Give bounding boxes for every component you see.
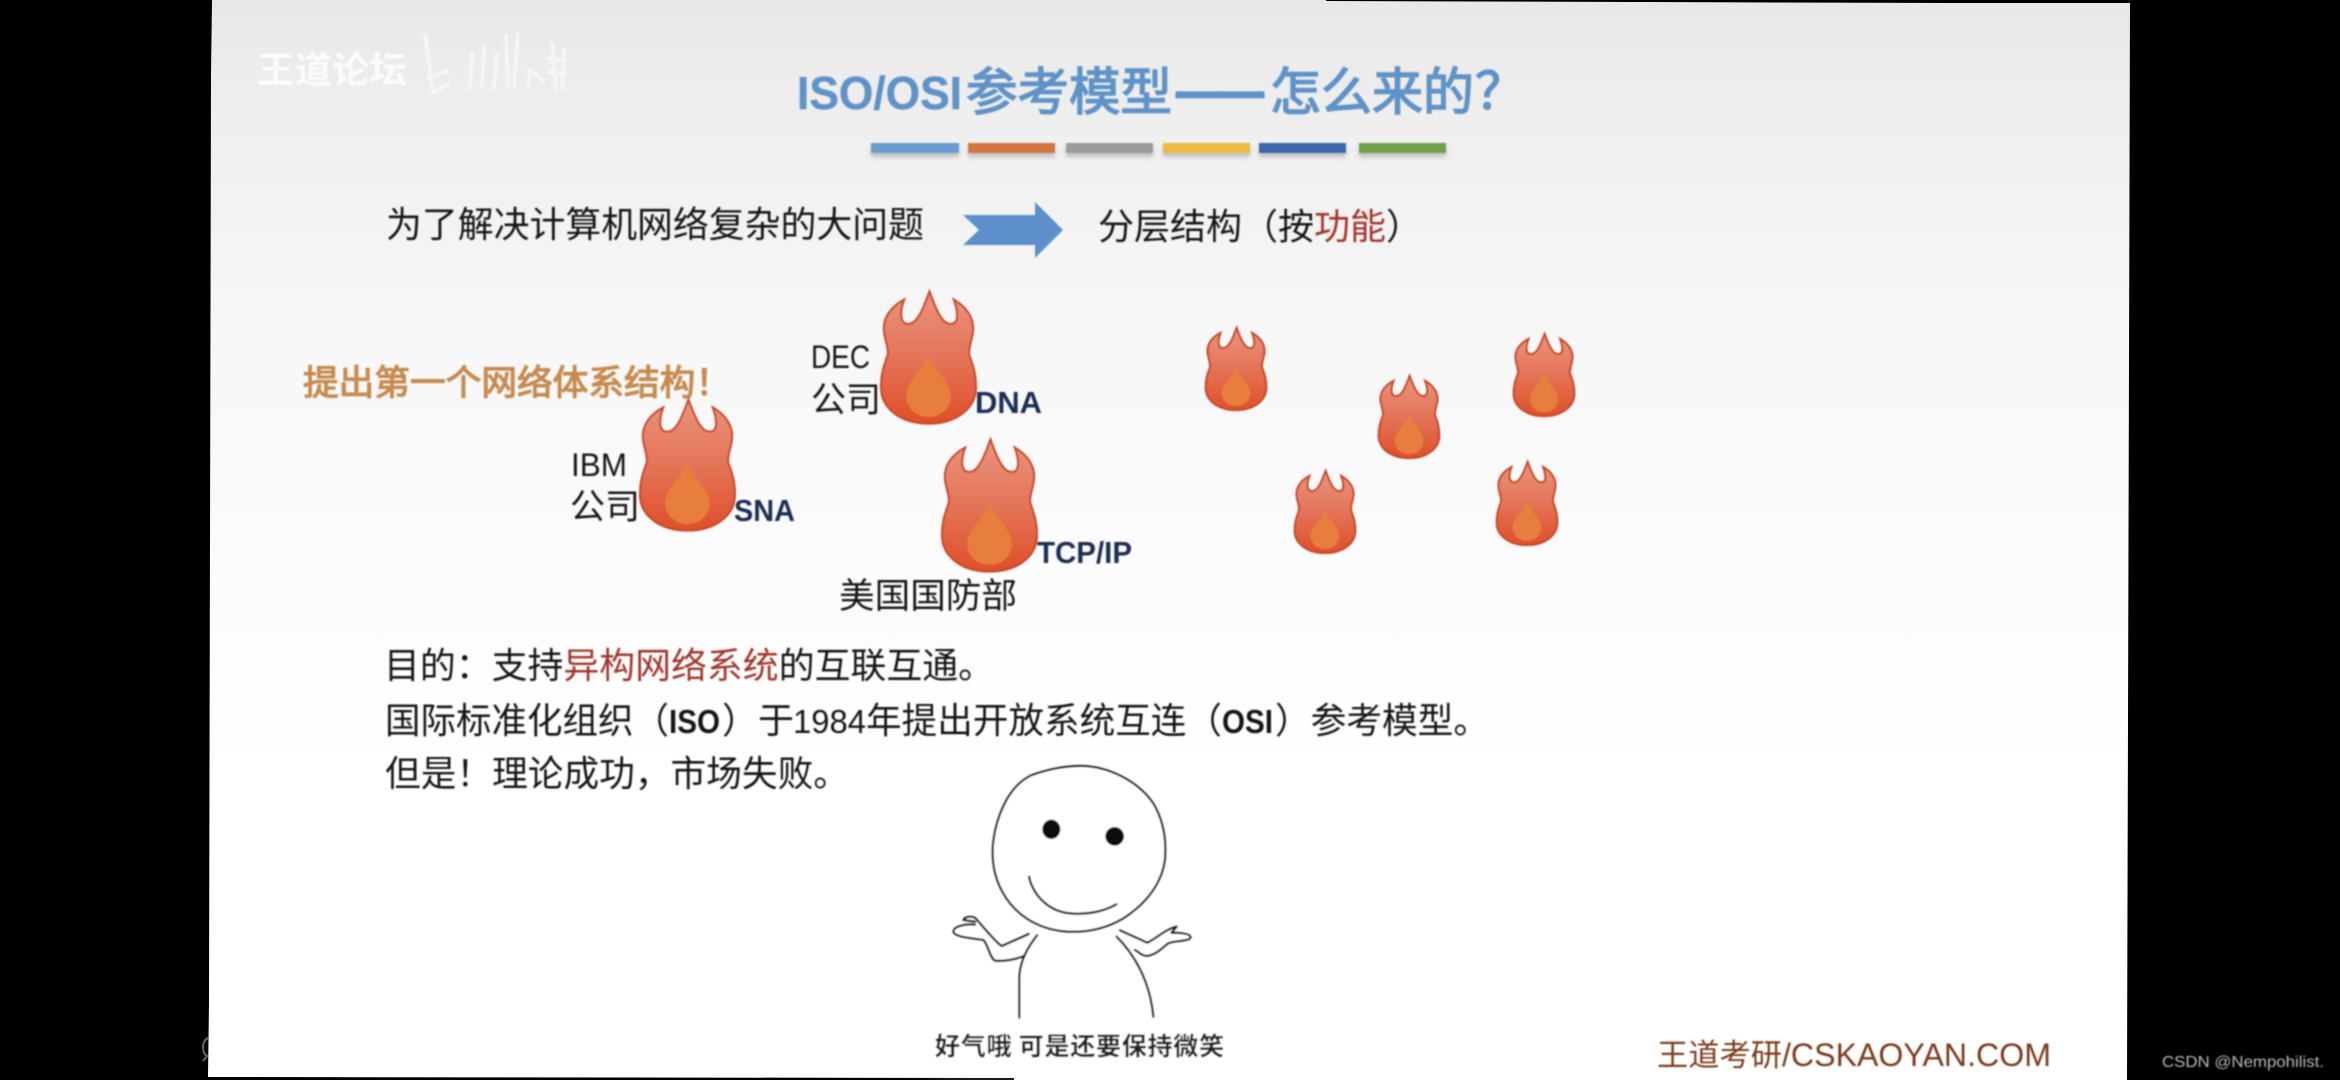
player icon fragment at the left edge: [203, 1038, 208, 1061]
text: purpose: 目的：支持异构网络系统的互联互通。: [384, 645, 994, 686]
title: ISO/OSI: [797, 67, 962, 119]
footer brand: [1657, 1037, 2051, 1073]
colour bar row: [871, 143, 1446, 157]
text: ISO 1984 OSI: OSI: [1222, 703, 1273, 740]
left eye: [1042, 820, 1060, 839]
text: ISO 1984 OSI: ISO: [669, 703, 720, 740]
label: TCP/IP: TCP/IP: [1037, 535, 1132, 570]
label: IBM company: 公司: [570, 488, 640, 527]
layered structure text: 分层结构（按功能）: [1098, 206, 1422, 247]
label: DEC: DEC: [811, 339, 870, 375]
text: ISO 1984 OSI: [385, 700, 1489, 741]
watermark: 王道论坛: 王道论坛: [257, 50, 407, 91]
arrow: [963, 202, 1063, 258]
CSDN credit: CSDN @Nempohilist.: [2162, 1054, 2324, 1071]
title: ——: [1177, 62, 1263, 119]
title: 怎么来的: [1270, 64, 1474, 121]
head: [993, 766, 1165, 932]
text: ISO 1984 OSI: 国际标准化组织（: [385, 700, 669, 741]
title: [797, 62, 1526, 121]
small flame 2: [1379, 376, 1439, 458]
text: ISO 1984 OSI: ）参考模型。: [1275, 700, 1489, 741]
small flame 1: [1206, 328, 1266, 410]
footer brand: 王道考研: [1657, 1038, 1782, 1073]
text: ISO 1984 OSI: 年提出开放系统互连（: [866, 700, 1222, 741]
smile: [1029, 877, 1116, 914]
label: SNA: SNA: [734, 493, 795, 528]
title: ？: [1475, 63, 1526, 120]
label: IBM: IBM: [571, 447, 627, 483]
flame: TCP/IP: [839, 439, 1132, 616]
watermark: scribbled logo: [425, 32, 566, 92]
small flame 4: [1295, 471, 1355, 553]
text: theory success market failure: 但是！理论成功，市场失败。: [385, 753, 849, 794]
white image backdrop behind character: [925, 762, 1225, 1062]
label: DEC company: 公司: [811, 381, 881, 420]
title: 参考模型: [966, 64, 1172, 121]
flame: DEC DNA: [811, 291, 1042, 424]
callout: first network architecture: 提出第一个网络体系结构！: [303, 364, 731, 403]
small flame 5: [1497, 462, 1557, 545]
right arm: [1120, 927, 1191, 956]
text: ISO 1984 OSI: ）于: [722, 700, 794, 741]
right eye: [1105, 827, 1124, 846]
body right: [1117, 937, 1153, 1017]
label: DNA: DNA: [975, 385, 1042, 420]
flame: IBM SNA: [570, 399, 795, 531]
figure caption: 好气哦 可是还要保持微笑: [935, 1027, 1224, 1063]
stick figure shrugging: [953, 766, 1191, 1018]
body left: [1019, 935, 1037, 1018]
label: US Department of Defense: 美国国防部: [839, 577, 1017, 616]
small flame 3: [1514, 334, 1574, 416]
footer brand: /CSKAOYAN.COM: [1782, 1037, 2051, 1073]
text: ISO 1984 OSI: 1984: [793, 703, 866, 740]
problem statement: 为了解决计算机网络复杂的大问题: [386, 204, 924, 245]
left arm: [953, 917, 1029, 961]
watermark: 王道论坛: [257, 32, 566, 92]
